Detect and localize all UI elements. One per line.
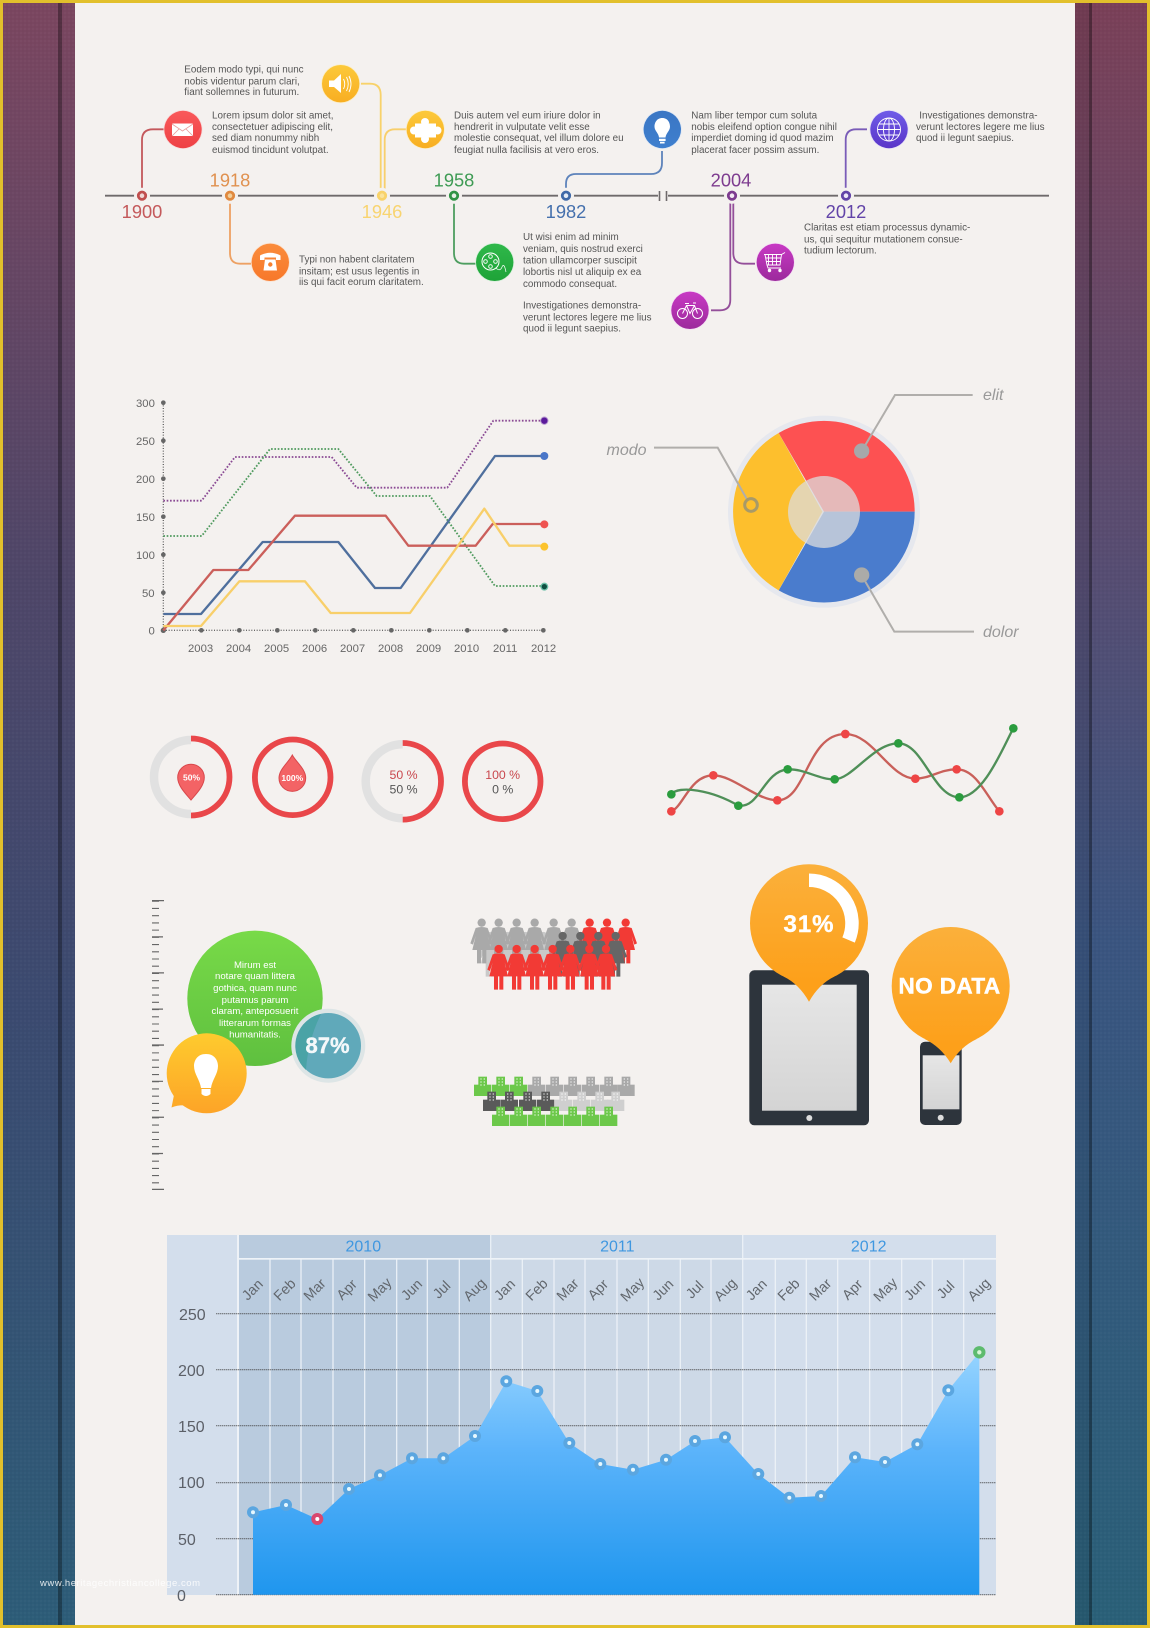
donut: drop 100% [255,740,330,815]
y-axis labels [177,1307,206,1605]
timeline text blocks: lobortis nisl ut aliquip ex ea [523,267,642,278]
line chart axis labels: 2005 [264,643,289,655]
pin: no data: NO DATA [899,973,1000,998]
month labels: Jun [650,1276,677,1304]
timeline text blocks: verunt lectores legere me lius [916,122,1045,133]
month labels: Feb [271,1276,300,1304]
donut gauges [154,738,540,820]
timeline text blocks: Claritas est etiam processus dynamic- [804,222,970,233]
timeline text blocks: nobis videntur parum clari, [184,76,300,87]
timeline connectors [142,84,867,310]
line chart plot [161,400,548,633]
timeline years: 2012 [826,201,866,222]
timeline years: 1918 [210,170,250,191]
green text bubble: litterarum formas [219,1018,291,1029]
month dividers [270,1235,964,1595]
month labels: Feb [523,1276,552,1304]
green text bubble: gothica, quam nunc [213,983,297,994]
donut: 50/50: 50 % [389,782,418,796]
donut: pin 50% [154,738,230,816]
month labels: Jan [239,1276,267,1304]
icon: puzzle piece [406,110,445,149]
icon: bicycle [670,291,710,330]
ruler [156,900,158,1190]
icon: telephone [251,243,290,282]
line chart axis labels: 2009 [416,643,441,655]
line chart axis labels: 250 [136,436,155,448]
donut: 100/0 [465,744,540,819]
donut: 50/50 [366,743,441,820]
timeline axis [105,195,1049,197]
line chart axis labels: 2008 [378,643,403,655]
timeline text blocks: commodo consequat. [523,279,617,290]
month labels: Aug [711,1276,740,1305]
watermark: www.heritagechristiancollege.com [39,1578,200,1589]
month labels: Jun [398,1276,426,1304]
month labels: Jun [901,1276,929,1304]
pie chart [606,387,1019,641]
month labels: Aug [461,1276,490,1305]
timeline text blocks: quod ii legunt saepius. [916,133,1014,144]
wave chart [667,724,1018,816]
timeline text blocks: molestie consequat, vel illum dolore eu [454,133,624,144]
timeline text blocks: Investigationes demonstra- [523,300,641,311]
icon: envelope [164,110,202,149]
line chart axis labels: 2007 [340,643,365,655]
timeline text blocks: tation ullamcorper suscipit [523,255,637,266]
line chart axis labels: 150 [136,512,155,524]
line chart [136,398,556,655]
timeline text blocks: Eodem modo typi, qui nunc [184,64,304,75]
timeline text blocks: sed diam nonummy nibh [212,133,319,144]
pie sector: modo [733,433,822,590]
line chart axis labels: 2010 [454,643,479,655]
chart background [167,1235,996,1595]
timeline text blocks: Investigationes demonstra- [919,110,1037,121]
timeline break mark [660,191,666,201]
yellow bulb bubble [167,1033,247,1113]
year headers: 2012 [851,1239,887,1256]
timeline text blocks: consectetuer adipiscing elit, [212,122,333,133]
timeline text blocks: Typi non habent claritatem [299,254,414,265]
y-axis labels: 200 [178,1363,205,1380]
line chart axis labels: 0 [148,626,155,638]
area fill [253,1352,979,1595]
timeline years [122,170,866,222]
month labels: Jan [743,1276,771,1304]
line chart axis labels: 2003 [188,643,213,655]
donut: pin 50%: 50% [183,772,200,782]
timeline years: 1982 [546,201,586,222]
pie sector: dolor [779,512,915,602]
month labels: Apr [585,1277,612,1304]
pictogram: buildings [474,1077,635,1126]
area chart [39,1235,996,1605]
green text bubble: putamus parum [222,995,288,1006]
line chart axis labels: 50 [142,588,155,600]
timeline text blocks: Ut wisi enim ad minim [523,232,619,243]
year headers: 2010 [346,1239,381,1256]
timeline text blocks: hendrerit in vulputate velit esse [454,122,590,133]
panel: timeline [105,64,1049,334]
timeline text blocks: verunt lectores legere me lius [523,312,652,323]
icon: globe [870,110,908,149]
data markers [249,1348,984,1523]
teal percent badge: 87% [305,1033,350,1058]
icon: shopping cart [756,243,795,282]
line chart axis labels: 2012 [531,643,556,655]
icon: speaker [321,64,360,103]
pictogram: people [470,918,637,990]
y-axis labels: 0 [177,1588,186,1605]
green text bubble [187,931,323,1066]
pie sector: elit [779,421,915,512]
month labels: Jul [683,1278,707,1302]
line chart axis labels: 2004 [226,643,251,655]
pie labels [606,387,1019,641]
timeline text blocks: us, qui sequitur mutationem consue- [804,234,963,245]
green text bubble: notare quam littera [215,971,296,982]
line chart axis labels [136,398,556,655]
icon: light bulb [643,110,682,149]
month labels: May [365,1274,396,1305]
green text bubble: claram, anteposuerit [212,1006,299,1017]
y-axis labels: 100 [178,1475,205,1492]
red series [667,730,1004,816]
green text bubble: humanitatis. [229,1030,281,1040]
year headers: 2011 [600,1239,635,1256]
pin: no data [892,927,1010,1063]
grid lines [216,1314,996,1595]
year headers [346,1239,887,1256]
pie halo [728,416,920,608]
month labels: Jul [430,1278,454,1302]
timeline text blocks: iis qui facit eorum claritatem. [299,277,424,288]
y-axis labels: 50 [178,1532,196,1549]
pie labels: dolor [983,624,1019,641]
timeline text blocks: imperdiet doming id quod mazim [691,133,834,144]
timeline years: 1900 [122,201,162,222]
line chart axis labels: 100 [136,550,155,562]
timeline text blocks [184,64,1045,334]
month labels: Feb [775,1276,804,1304]
tablet [749,970,869,1125]
month labels: Mar [301,1276,330,1304]
timeline text blocks: feugiat nulla facilisis at vero eros. [454,145,599,156]
timeline text blocks: quod ii legunt saepius. [523,323,621,334]
donut: 50/50: 50 % [389,768,418,782]
green series [667,724,1018,810]
month labels: Aug [965,1276,994,1305]
timeline text blocks: Duis autem vel eum iriure dolor in [454,110,601,121]
month labels: Mar [554,1276,583,1304]
pin: 31% [750,864,868,1002]
phone [920,1042,962,1125]
month labels: Apr [334,1277,361,1304]
timeline text blocks: insitam; est usus legentis in [299,266,419,277]
line chart axis labels: 2006 [302,643,327,655]
timeline text blocks: Lorem ipsum dolor sit amet, [212,110,333,121]
line chart axis labels: 2011 [493,643,517,655]
teal percent badge [291,1009,365,1083]
donut: drop 100%: 100% [281,773,304,783]
donut: 100/0: 100 % [485,768,520,782]
green text bubble: Mirum est [234,960,276,971]
timeline text blocks: euismod tincidunt volutpat. [212,145,329,156]
timeline text blocks: fiant sollemnes in futurum. [184,87,299,98]
bubble cluster [167,931,365,1113]
month labels: Apr [839,1277,867,1304]
callout lines [654,395,974,632]
pin: 31%: 31% [783,911,835,938]
timeline text blocks: tudium lectorum. [804,245,877,256]
month labels: May [618,1274,649,1305]
month labels: Mar [807,1276,835,1304]
line chart axis labels: 200 [136,474,155,486]
timeline years: 1946 [362,201,402,222]
month labels: May [871,1274,902,1305]
timeline text blocks: veniam, quis nostrud exerci [523,244,643,255]
pie labels: modo [606,442,647,459]
pie center [788,476,860,548]
timeline text blocks: placerat facer possim assum. [691,145,819,156]
timeline years: 1958 [434,170,474,191]
y-axis labels: 250 [179,1307,206,1324]
timeline text blocks: nobis eleifend option congue nihil [691,122,837,133]
line chart axis labels: 300 [136,398,155,410]
devices [749,864,1010,1125]
timeline nodes [134,188,854,204]
timeline years: 2004 [711,170,751,191]
month labels [239,1274,994,1305]
month labels: Jan [491,1276,519,1304]
y-axis labels: 150 [178,1419,205,1436]
month labels: Jul [934,1278,958,1302]
icon: film reel [475,243,514,282]
donut: 100/0: 0 % [492,782,513,796]
timeline text blocks: Nam liber tempor cum soluta [691,110,818,121]
pie labels: elit [983,387,1004,404]
